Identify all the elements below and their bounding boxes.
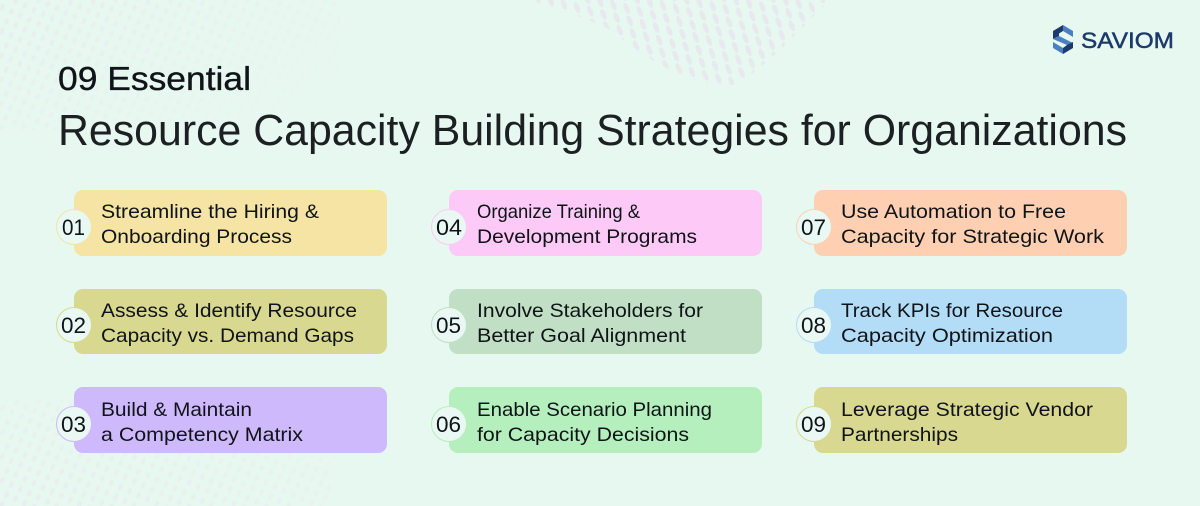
- number badge 08: [796, 308, 832, 342]
- text 07: Capacity for Strategic Work: [841, 226, 1104, 248]
- card 03: [74, 387, 387, 453]
- text 05: Involve Stakeholders for: [477, 300, 704, 322]
- logo: Saviom: [1053, 25, 1174, 54]
- icon: Saviom hexagon S: [1053, 25, 1073, 54]
- text 04: Organize Training &: [477, 201, 640, 223]
- card 04: [449, 190, 762, 256]
- text 04: Development Programs: [477, 226, 697, 248]
- text 01: [101, 201, 319, 248]
- number badge 05: [432, 308, 466, 342]
- strategy 02: [56, 289, 387, 354]
- text 03: [101, 399, 303, 446]
- text 03: a Competency Matrix: [101, 424, 303, 446]
- text 09: Leverage Strategic Vendor: [841, 399, 1094, 421]
- heading: main title: Resource Capacity Building Strategies for Organizations: [58, 106, 1127, 155]
- text 09: Partnerships: [841, 424, 958, 446]
- card 02: [74, 289, 387, 354]
- strategy 09: [796, 387, 1127, 453]
- heading: 09 Essential: 09 Essential: [58, 60, 251, 97]
- text 07: [841, 201, 1104, 248]
- card 05: [449, 289, 762, 354]
- text 08: Capacity Optimization: [841, 325, 1053, 347]
- card 07: [814, 190, 1127, 256]
- number badge 09: 09: [801, 412, 826, 437]
- text 02: [101, 300, 357, 347]
- text 06: for Capacity Decisions: [477, 424, 689, 446]
- text 05: Better Goal Alignment: [477, 325, 687, 347]
- background dot pattern: bottom left: [0, 434, 214, 506]
- card 01: [74, 190, 387, 256]
- number badge 01: [56, 210, 92, 244]
- number badge 06: 06: [436, 412, 461, 437]
- background dot pattern: top centre: [530, 0, 830, 86]
- text 08: Track KPIs for Resource: [841, 300, 1063, 322]
- number badge 09: [796, 406, 832, 442]
- logo wordmark: SAVIOM: [1081, 28, 1174, 53]
- number badge 05: 05: [436, 313, 461, 338]
- number badge 04: [432, 210, 466, 244]
- number badge 07: 07: [801, 215, 826, 240]
- card 09: [814, 387, 1127, 453]
- strategy 01: [56, 190, 387, 256]
- text 01: Onboarding Process: [101, 226, 292, 248]
- number badge 03: 03: [61, 412, 86, 437]
- text 09: [841, 399, 1094, 446]
- text 02: Capacity vs. Demand Gaps: [101, 325, 354, 347]
- text 07: Use Automation to Free: [841, 201, 1066, 223]
- background dot pattern: top left: [0, 0, 124, 89]
- strategy 06: [432, 387, 762, 453]
- text 04: [477, 201, 697, 248]
- text 03: Build & Maintain: [101, 399, 252, 421]
- strategy 03: [56, 387, 387, 453]
- text 06: [477, 399, 712, 446]
- strategy 05: [432, 289, 762, 354]
- number badge 01: 01: [62, 215, 85, 240]
- number badge 03: [56, 406, 92, 442]
- number badge 08: 08: [801, 313, 826, 338]
- text 01: Streamline the Hiring &: [101, 201, 319, 223]
- number badge 04: 04: [436, 215, 462, 240]
- strategy 08: [796, 289, 1127, 354]
- text 05: [477, 300, 704, 347]
- number badge 06: [432, 406, 466, 442]
- card 08: [814, 289, 1127, 354]
- strategy 04: [432, 190, 762, 256]
- strategy 07: [796, 190, 1127, 256]
- text 02: Assess & Identify Resource: [101, 300, 357, 322]
- text 06: Enable Scenario Planning: [477, 399, 712, 421]
- number badge 02: [56, 308, 92, 342]
- number badge 02: 02: [61, 313, 86, 338]
- card 06: [449, 387, 762, 453]
- number badge 07: [796, 210, 832, 244]
- text 08: [841, 300, 1063, 347]
